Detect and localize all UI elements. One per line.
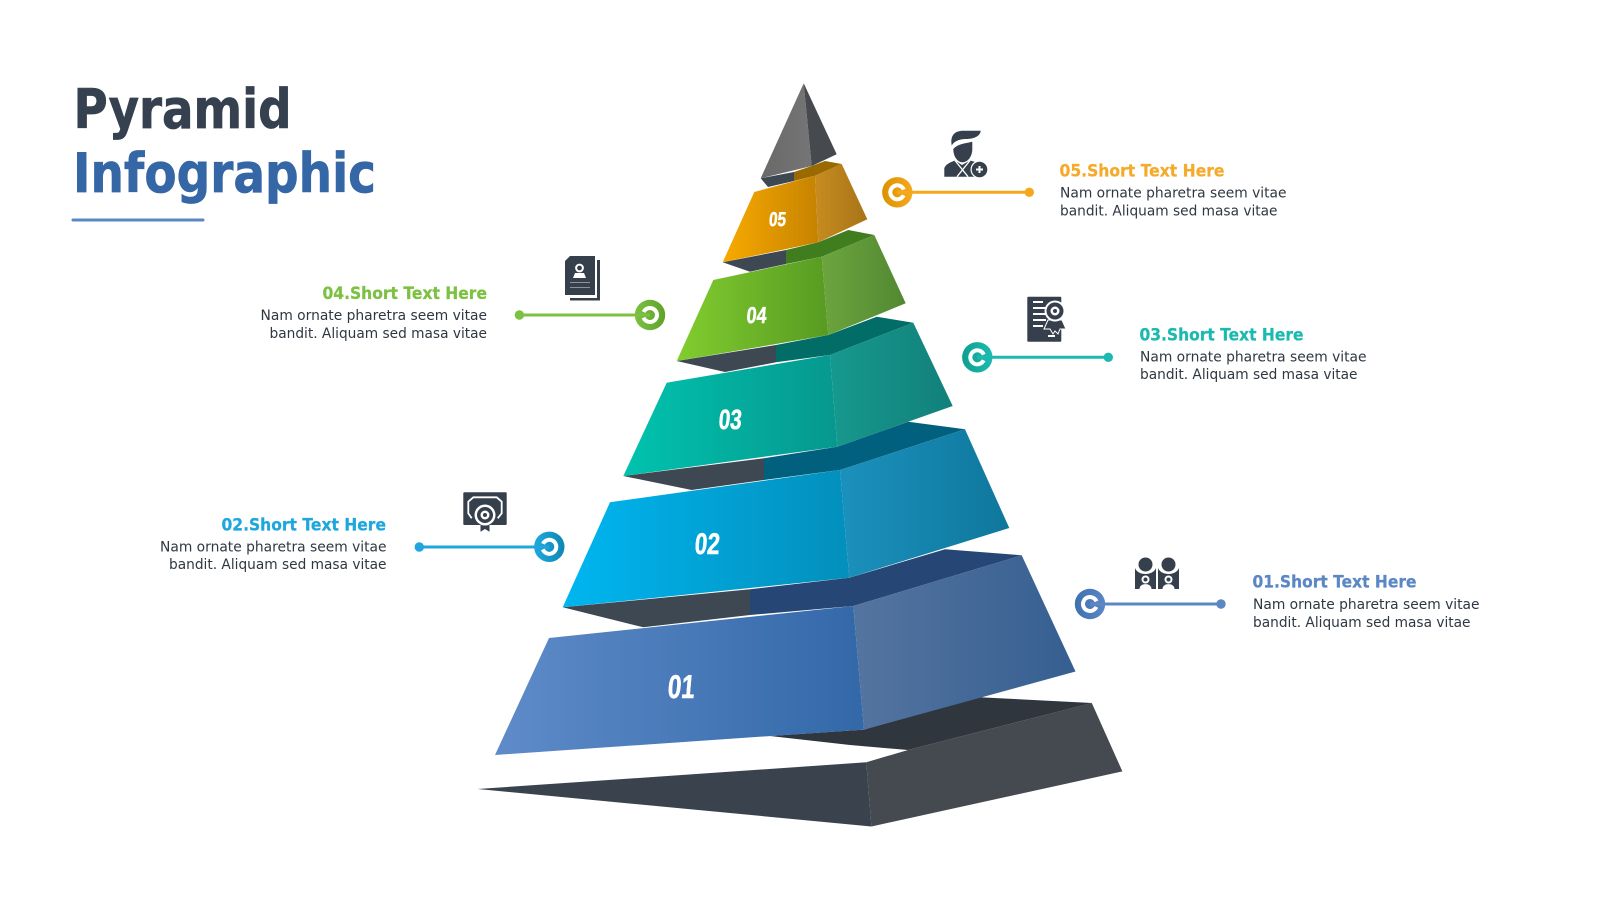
connector 05: [882, 177, 1034, 208]
tier 02: [563, 422, 1009, 607]
text 04: [260, 284, 487, 342]
tier number 05: 05: [768, 209, 787, 231]
title: Pyramid: [74, 78, 292, 141]
tier 03: [623, 317, 953, 476]
connector 04: [515, 300, 665, 330]
icon: document with person: [565, 256, 600, 300]
text 03: bandit. Aliquam sed masa vitae: [1140, 367, 1358, 383]
tier number 04: 04: [746, 302, 768, 328]
text 02: Nam ornate pharetra seem vitae: [160, 540, 386, 556]
text 02: bandit. Aliquam sed masa vitae: [169, 557, 386, 573]
connector 01: [1075, 589, 1226, 619]
text 01: [1252, 572, 1480, 631]
text 05: Nam ornate pharetra seem vitae: [1060, 186, 1286, 202]
tier number 01: 01: [666, 669, 697, 706]
callout 01: [1075, 558, 1480, 631]
text 05: [1060, 162, 1286, 220]
callout 05: [882, 131, 1286, 220]
text 02: [160, 516, 386, 573]
text 05: bandit. Aliquam sed masa vitae: [1060, 204, 1278, 220]
tier number 02: 02: [693, 528, 721, 561]
tier 04: [677, 230, 906, 361]
text 01: Nam ornate pharetra seem vitae: [1253, 597, 1480, 613]
callout 03: [962, 297, 1366, 383]
icon: doctor: [944, 131, 988, 178]
connector 03: [962, 342, 1113, 372]
icon: diploma: [463, 492, 507, 532]
callout 02: [160, 492, 564, 573]
text 03: Nam ornate pharetra seem vitae: [1140, 350, 1366, 366]
text 01: 01.Short Text Here: [1252, 572, 1416, 592]
title: Infographic: [73, 142, 376, 205]
icon: certificate: [1027, 297, 1066, 342]
text 01: bandit. Aliquam sed masa vitae: [1253, 615, 1470, 631]
text 04: bandit. Aliquam sed masa vitae: [270, 326, 487, 342]
pyramid capstone: [761, 83, 837, 178]
text 03: 03.Short Text Here: [1140, 326, 1304, 344]
pyramid: [478, 83, 1122, 827]
icon: two people: [1135, 558, 1179, 589]
text 02: 02.Short Text Here: [222, 516, 386, 534]
callout 04: [260, 256, 665, 342]
title: [72, 78, 376, 222]
text 05: 05.Short Text Here: [1060, 162, 1224, 180]
base slab: [478, 697, 1122, 826]
text 03: [1140, 326, 1366, 383]
tier 05: [723, 161, 867, 262]
text 04: 04.Short Text Here: [322, 284, 487, 303]
tier number 03: 03: [717, 404, 743, 435]
text 04: Nam ornate pharetra seem vitae: [260, 308, 487, 324]
tier 01: [495, 549, 1076, 755]
connector 02: [415, 532, 564, 562]
